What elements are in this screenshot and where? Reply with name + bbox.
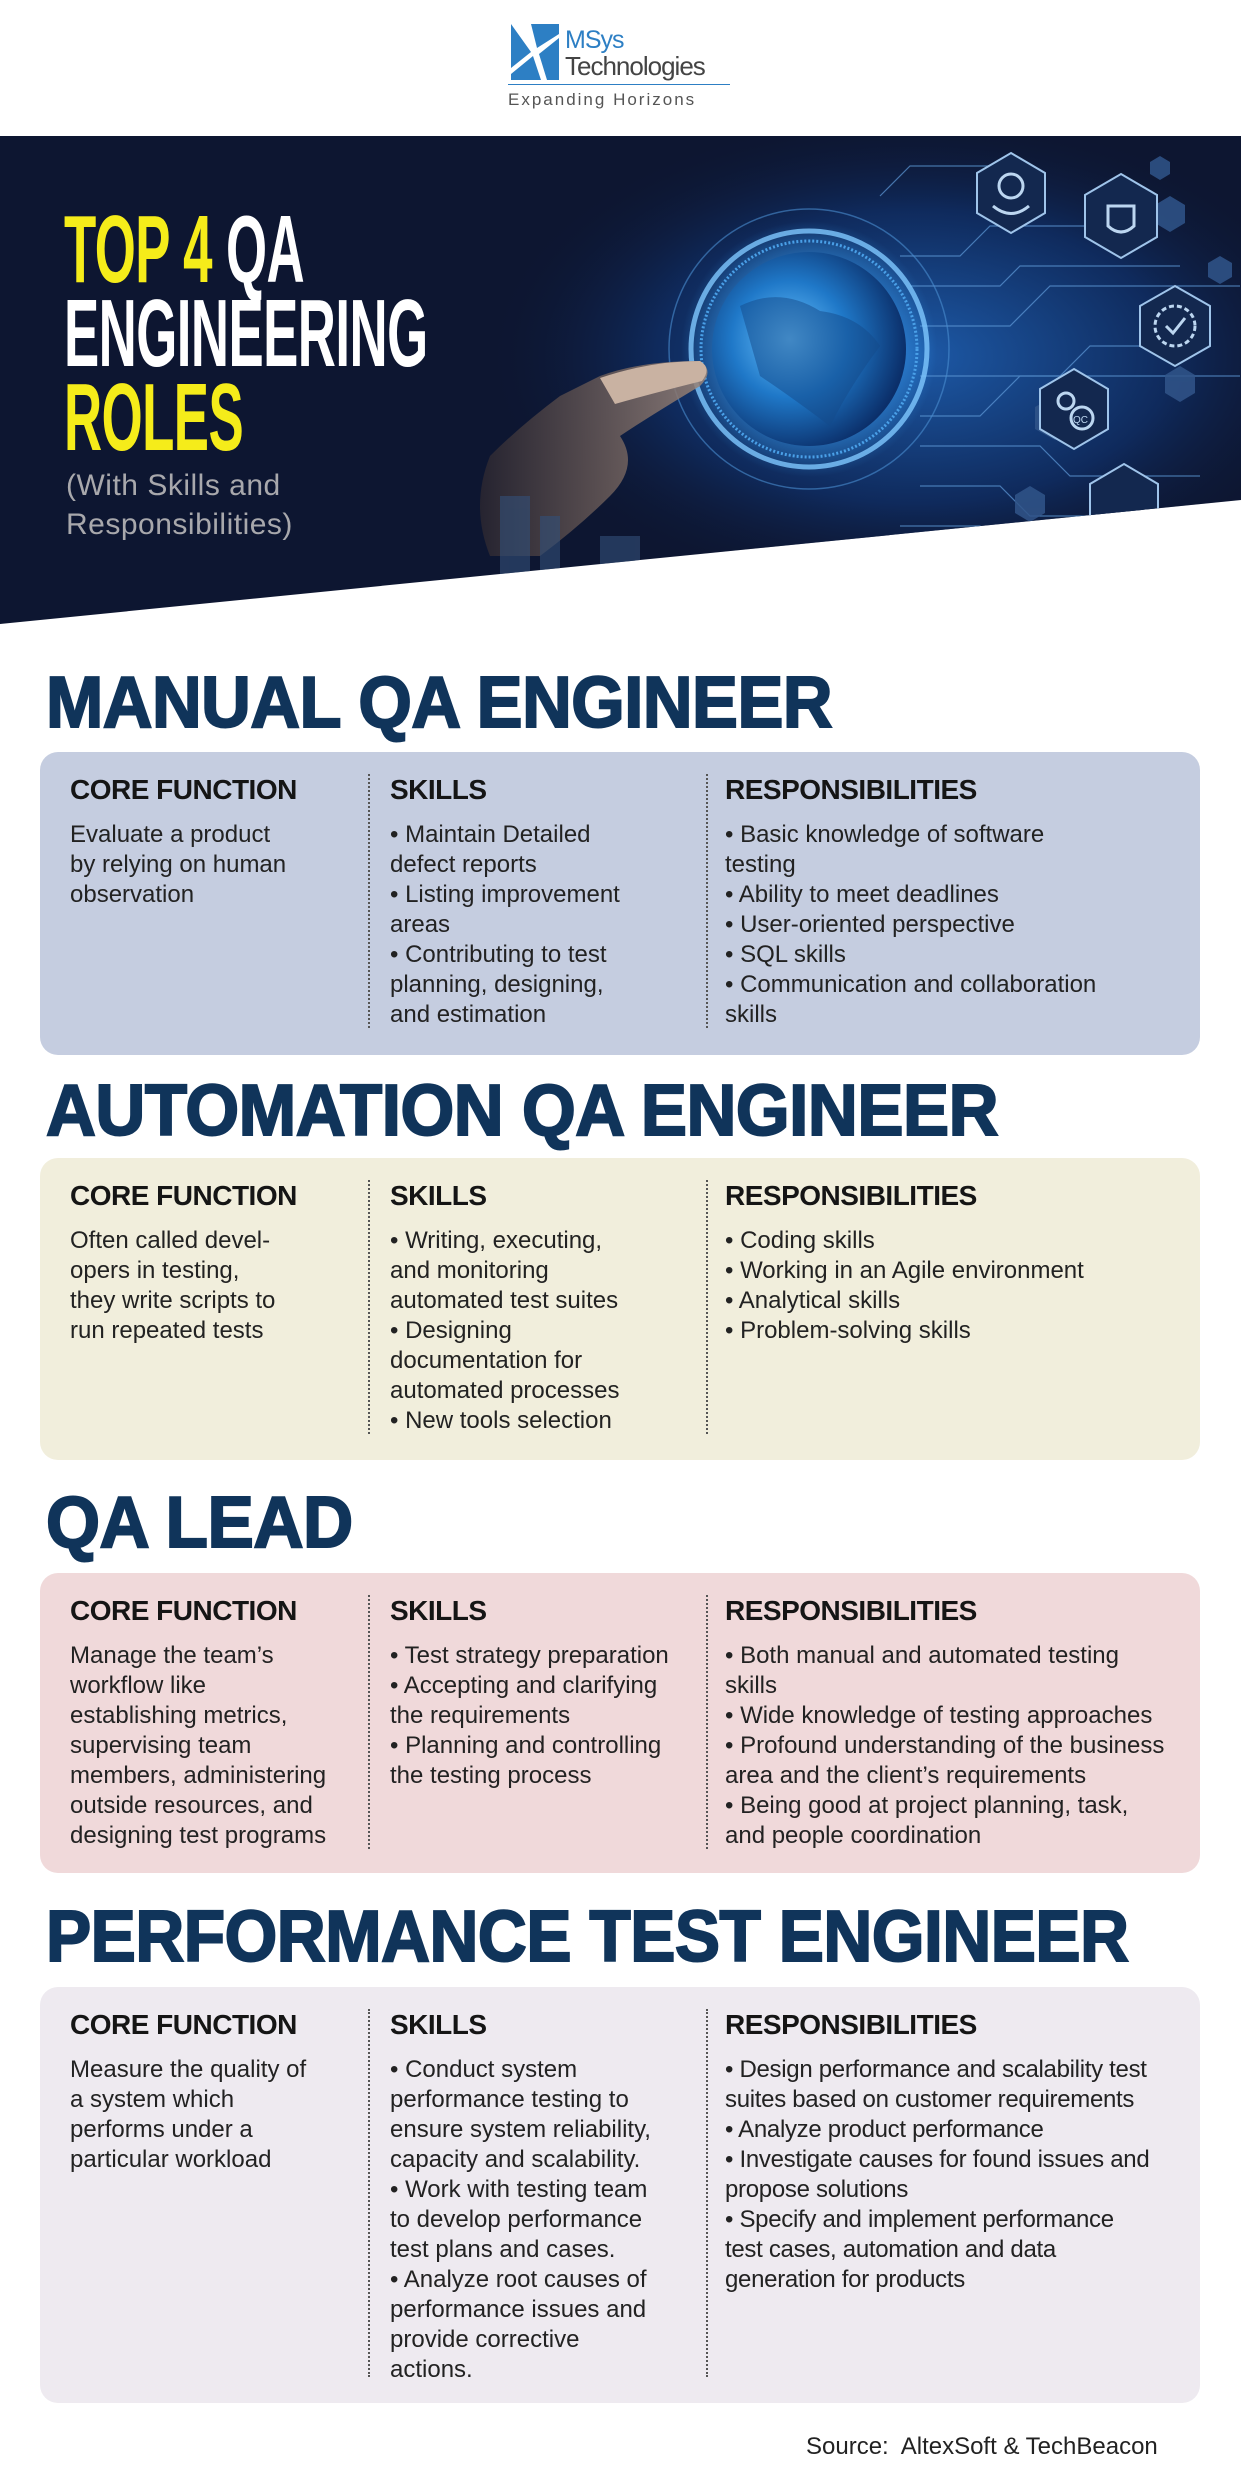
responsibilities: RESPONSIBILITIES: [725, 1180, 977, 1211]
responsibilities: • Specify and implement performance: [725, 2206, 1114, 2233]
responsibilities: • Wide knowledge of testing approaches: [725, 1702, 1152, 1729]
title: [64, 215, 425, 451]
core function: CORE FUNCTION: [70, 2009, 297, 2040]
responsibilities: • Design performance and scalability test: [725, 2056, 1147, 2083]
responsibilities: skills: [725, 1001, 777, 1028]
title: ENGINEERING: [64, 280, 428, 387]
core function: [70, 1180, 297, 1344]
core function: they write scripts to: [70, 1287, 275, 1314]
hand: [480, 361, 708, 556]
skills: and estimation: [390, 1001, 546, 1028]
skills: • Accepting and clarifying: [390, 1672, 657, 1699]
responsibilities: RESPONSIBILITIES: [725, 1595, 977, 1626]
core function: particular workload: [70, 2146, 271, 2173]
heading: manual QA engineer: MANUAL QA ENGINEER: [46, 663, 832, 743]
skills: • Analyze root causes of: [390, 2266, 647, 2293]
responsibilities: propose solutions: [725, 2176, 908, 2203]
core function: observation: [70, 881, 194, 908]
core function: Manage the team’s: [70, 1642, 274, 1669]
responsibilities: testing: [725, 851, 796, 878]
skills: ensure system reliability,: [390, 2116, 651, 2143]
skills: [390, 1595, 669, 1789]
core function: members, administering: [70, 1762, 326, 1789]
responsibilities: suites based on customer requirements: [725, 2086, 1134, 2113]
banner illustration: QC: [1073, 415, 1088, 426]
skills: SKILLS: [390, 774, 487, 805]
skills: • Listing improvement: [390, 881, 620, 908]
responsibilities: • Being good at project planning, task,: [725, 1792, 1128, 1819]
skills: automated test suites: [390, 1287, 618, 1314]
responsibilities: • Basic knowledge of software: [725, 821, 1044, 848]
subtitle: Responsibilities): [66, 508, 293, 541]
skills: performance issues and: [390, 2296, 646, 2323]
responsibilities: and people coordination: [725, 1822, 981, 1849]
responsibilities: • Investigate causes for found issues and: [725, 2146, 1149, 2173]
responsibilities: skills: [725, 1672, 777, 1699]
core function: performs under a: [70, 2116, 253, 2143]
responsibilities: • Analyze product performance: [725, 2116, 1044, 2143]
core function: outside resources, and: [70, 1792, 313, 1819]
core function: [70, 1595, 326, 1849]
skills: the testing process: [390, 1762, 591, 1789]
skills: [390, 774, 620, 1028]
responsibilities: • Problem-solving skills: [725, 1317, 971, 1344]
skills: [390, 1180, 619, 1434]
source note: Source: AltexSoft & TechBeacon: [806, 2433, 1158, 2460]
core function: CORE FUNCTION: [70, 1595, 297, 1626]
core function: workflow like: [70, 1672, 206, 1699]
responsibilities: RESPONSIBILITIES: [725, 774, 977, 805]
core function: CORE FUNCTION: [70, 774, 297, 805]
responsibilities: • Ability to meet deadlines: [725, 881, 999, 908]
banner illustration: [480, 152, 1241, 574]
core function: establishing metrics,: [70, 1702, 287, 1729]
responsibilities: [725, 2009, 1149, 2293]
skills: areas: [390, 911, 450, 938]
responsibilities: • User-oriented perspective: [725, 911, 1015, 938]
core function: run repeated tests: [70, 1317, 263, 1344]
heading: QA lead: QA LEAD: [46, 1483, 353, 1563]
core function: [70, 2009, 306, 2173]
responsibilities: RESPONSIBILITIES: [725, 2009, 977, 2040]
skills: the requirements: [390, 1702, 570, 1729]
skills: automated processes: [390, 1377, 619, 1404]
skills: SKILLS: [390, 1595, 487, 1626]
core function: by relying on human: [70, 851, 286, 878]
skills: actions.: [390, 2356, 473, 2383]
responsibilities: • Coding skills: [725, 1227, 875, 1254]
responsibilities: • Profound understanding of the business: [725, 1732, 1164, 1759]
core function: CORE FUNCTION: [70, 1180, 297, 1211]
logo: Expanding Horizons: [508, 90, 696, 109]
skills: to develop performance: [390, 2206, 642, 2233]
skills: • Writing, executing,: [390, 1227, 602, 1254]
heading: performance test engineer: PERFORMANCE TEST ENGINEER: [46, 1897, 1128, 1977]
skills: [390, 2009, 651, 2383]
skills: • Planning and controlling: [390, 1732, 661, 1759]
logo: Technologies: [565, 51, 705, 81]
skills: SKILLS: [390, 2009, 487, 2040]
core function: designing test programs: [70, 1822, 326, 1849]
skills: • Maintain Detailed: [390, 821, 591, 848]
core function: opers in testing,: [70, 1257, 239, 1284]
panel: automation QA: [40, 1158, 1200, 1460]
title: ROLES: [64, 364, 243, 471]
skills: SKILLS: [390, 1180, 487, 1211]
core function: Measure the quality of: [70, 2056, 306, 2083]
responsibilities: area and the client’s requirements: [725, 1762, 1086, 1789]
heading: automation QA engineer: AUTOMATION QA ENGINEER: [46, 1071, 998, 1151]
panel: QA lead: [40, 1573, 1200, 1873]
skills: • Test strategy preparation: [390, 1642, 669, 1669]
responsibilities: • Working in an Agile environment: [725, 1257, 1084, 1284]
core function: supervising team: [70, 1732, 251, 1759]
skills: test plans and cases.: [390, 2236, 615, 2263]
skills: • Designing: [390, 1317, 512, 1344]
responsibilities: • SQL skills: [725, 941, 846, 968]
banner: [0, 136, 1241, 626]
skills: planning, designing,: [390, 971, 604, 998]
responsibilities: generation for products: [725, 2266, 965, 2293]
responsibilities: • Communication and collaboration: [725, 971, 1096, 998]
icon: logo mark: [511, 24, 559, 80]
responsibilities: • Analytical skills: [725, 1287, 900, 1314]
skills: and monitoring: [390, 1257, 549, 1284]
responsibilities: test cases, automation and data: [725, 2236, 1056, 2263]
skills: • New tools selection: [390, 1407, 612, 1434]
responsibilities: • Both manual and automated testing: [725, 1642, 1119, 1669]
skills: • Work with testing team: [390, 2176, 647, 2203]
responsibilities: [725, 1595, 1164, 1849]
core function: a system which: [70, 2086, 234, 2113]
skills: capacity and scalability.: [390, 2146, 640, 2173]
skills: provide corrective: [390, 2326, 579, 2353]
core function: Often called devel-: [70, 1227, 270, 1254]
responsibilities: [725, 1180, 1084, 1344]
panel: manual QA: [40, 752, 1200, 1055]
skills: documentation for: [390, 1347, 582, 1374]
subtitle: (With Skills and: [66, 469, 281, 502]
title: TOP 4 QA: [64, 196, 304, 303]
core function: [70, 774, 297, 908]
core function: Evaluate a product: [70, 821, 270, 848]
skills: • Contributing to test: [390, 941, 607, 968]
skills: performance testing to: [390, 2086, 629, 2113]
responsibilities: [725, 774, 1096, 1028]
logo text: MSys: [565, 26, 624, 54]
logo: [508, 24, 730, 109]
subtitle: [68, 474, 290, 540]
skills: • Conduct system: [390, 2056, 577, 2083]
panel: performance test: [40, 1987, 1200, 2403]
skills: defect reports: [390, 851, 537, 878]
